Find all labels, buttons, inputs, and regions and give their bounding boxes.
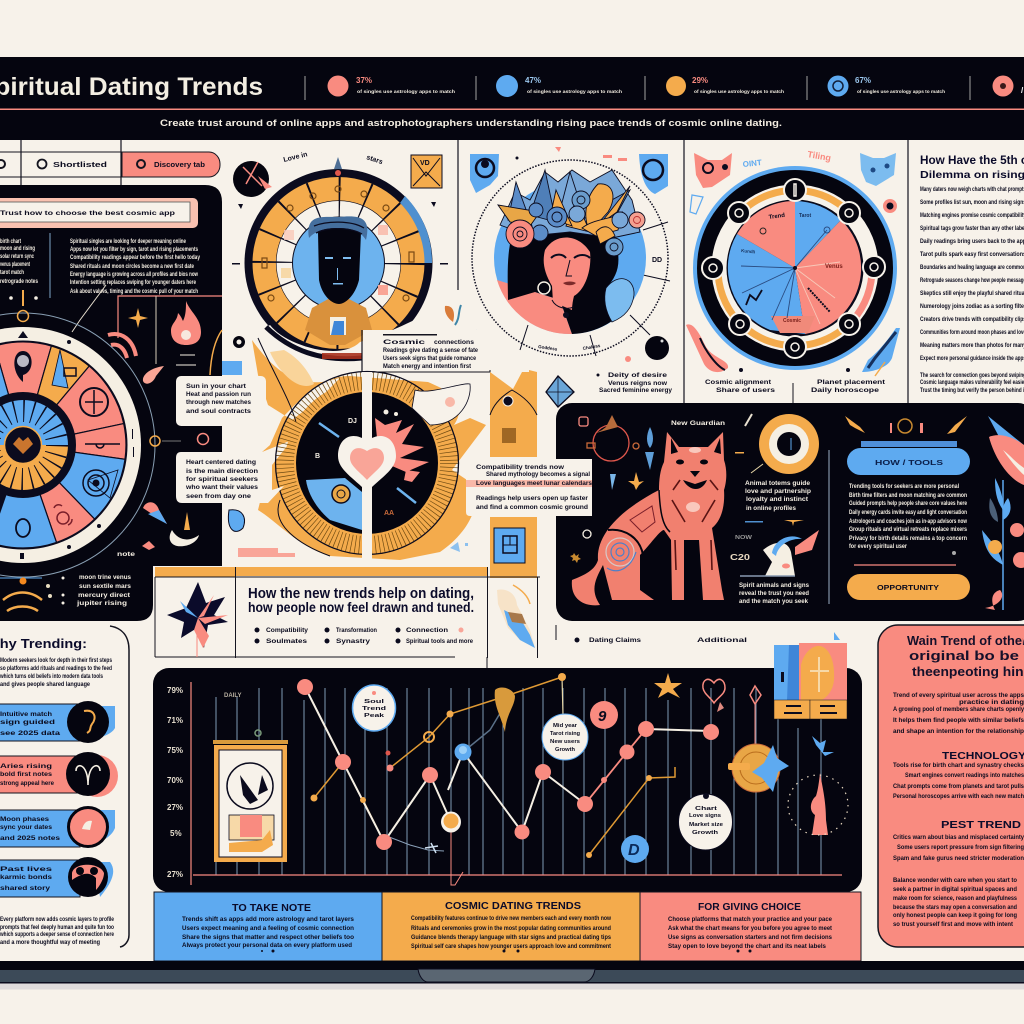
intro (0, 657, 112, 688)
list item: blue 3: sync your dates (0, 824, 53, 831)
card: orange: Compatibility features continue to drive new members each and every month now (411, 915, 611, 922)
icon: rainbow arcs (108, 334, 136, 358)
wheel blue petals (52, 350, 118, 498)
callout left top: Sun in your chart (186, 383, 246, 390)
callout left top: through new matches (186, 399, 252, 406)
legend lines: sun sextile mars (79, 584, 132, 590)
legend lines: moon trine venus (79, 575, 132, 581)
small charms (142, 366, 199, 550)
oval note 2: Mid year (553, 723, 577, 729)
list item: blue 4: shared story (0, 885, 51, 892)
chart: trends line chart panel (153, 643, 862, 892)
icon: bird (497, 585, 535, 648)
note card: Users seek signs that guide romance (383, 355, 476, 362)
list item: blue 1 (0, 701, 115, 743)
y axis labels: 79% (167, 686, 183, 695)
ring ticks (18, 331, 134, 559)
icon: plant (982, 416, 1024, 610)
list item: coral aries: strong appeal here (0, 780, 55, 787)
panel: compatibility pie wheel: Kundli (741, 248, 755, 254)
panel: compatibility pie wheel: Cosmic (783, 318, 801, 324)
y axis labels: 75% (167, 746, 183, 755)
panel: compatibility pie wheel (686, 149, 900, 403)
callout right over wolf panel: Love languages meet lunar calendars (476, 480, 593, 487)
panel: goddess portrait: Goddess (538, 344, 558, 352)
list item: blue 3 (0, 808, 115, 847)
article text: TECHNOLOGY (942, 751, 1024, 762)
pie nodes (702, 179, 885, 358)
intro: so platforms add rituals and readings to the feed (0, 665, 112, 672)
card: orange (382, 892, 640, 961)
oval note 2 (542, 714, 588, 760)
bird text: and the match you seek (739, 599, 809, 605)
callout right over wolf panel: Shared mythology becomes a signal (486, 471, 590, 478)
note card: Cosmic (383, 339, 426, 346)
article text: Balance wonder with care when you start to (893, 877, 1017, 884)
callout right over wolf panel (466, 459, 593, 516)
portrait figure (305, 216, 372, 345)
list item: blue 4: karmic bonds (0, 874, 53, 881)
caption: Daily horoscope (811, 387, 880, 394)
footer text: which supports a deeper sense of connection here (0, 931, 114, 938)
blue highlight point (454, 744, 472, 760)
article text: PEST TREND (941, 820, 1021, 831)
y axis labels (167, 686, 183, 879)
flower crown (498, 170, 645, 256)
text columns (0, 233, 201, 298)
wolf text: loyalty and instinct (746, 497, 808, 503)
y axis labels: 27% (167, 803, 183, 812)
callout left bottom (176, 452, 284, 503)
panel: compatibility pie wheel: Trend (768, 213, 786, 221)
article text: so trust yourself first and move with intent (893, 921, 1013, 928)
callout left bottom: is the main direction (186, 468, 258, 475)
coral badge (590, 701, 618, 729)
icon: altar (774, 643, 847, 719)
sun black disc (295, 391, 439, 535)
card: coral: Stay open to love beyond the chart and its neat labels (668, 943, 827, 950)
list item: blue 4 (0, 857, 113, 897)
caption (705, 368, 885, 403)
icon: winged bird: NOW (735, 535, 752, 541)
list item: blue 1: Intuitive match (0, 711, 52, 718)
card: orange: COSMIC DATING TRENDS (445, 901, 581, 912)
callout banner: Trust how to choose the best cosmic app (0, 210, 175, 217)
card: coral: Use signs as conversation starters and not firm decisions (668, 934, 833, 941)
tab: active coral (122, 152, 220, 177)
bullets (254, 627, 474, 645)
wolf column text: Daily energy cards invite easy and light conversation (849, 510, 967, 516)
stat 4: 67% (855, 76, 871, 85)
panel: coral right article: original bo be (909, 648, 1019, 663)
note card: Match energy and intention first (383, 363, 472, 370)
icon: orange seal with blue star (728, 744, 789, 792)
caption: Planet placement (817, 379, 885, 386)
panel: coral right article: theenpeoting hind (912, 664, 1024, 679)
labels (232, 151, 448, 264)
icon: heart (703, 679, 725, 712)
stat 1 (305, 76, 455, 100)
list item: coral aries: bold first notes (0, 771, 53, 778)
caption: Share of users (716, 387, 776, 394)
tab: active coral: Discovery tab (154, 162, 205, 169)
panel: compatibility pie wheel: Tarot (799, 213, 811, 219)
card: blue: Trends shift as apps add more astrology and tarot layers (182, 916, 355, 923)
section: heart sun illustration: DJ (348, 418, 357, 425)
blue badge (621, 835, 649, 863)
orbit ring (0, 313, 155, 577)
oval note 3: Love signs (689, 813, 721, 819)
callout left bottom: seen from day one (186, 493, 252, 500)
oval note 1 (352, 685, 396, 731)
egg point (441, 812, 461, 832)
callout left bottom: Heart centered dating (186, 459, 256, 466)
wolf text: Animal totems guide (745, 481, 811, 487)
icon: star (654, 673, 682, 698)
oval note 1: Trend (362, 706, 386, 712)
card: coral: Choose platforms that match your practice and your pace (668, 916, 833, 923)
labels: stars (365, 154, 384, 166)
stat 3: 29% (692, 76, 708, 85)
ring pastel tiles (281, 225, 388, 295)
orange tag (490, 370, 537, 578)
y axis labels: 27% (167, 870, 183, 879)
card: blue: Users expect meaning and a feeling of cosmic connection (182, 925, 354, 932)
node on orbit (150, 434, 208, 446)
icon: leaves (845, 416, 967, 447)
list item: blue 1: see 2025 data (0, 730, 61, 737)
ring glyphs (262, 186, 414, 301)
pie sectors (728, 201, 861, 334)
oval note 3: Chart (695, 806, 718, 812)
card: coral: Ask what the chart means for you before you agree to meet (668, 925, 832, 932)
decor: pen and wand (686, 324, 728, 372)
small orange points (310, 673, 652, 858)
note card (362, 330, 495, 374)
tab bar: Shortlisted (53, 162, 107, 169)
article text: practice in dating (959, 699, 1024, 706)
legend lines: mercury direct (78, 593, 130, 599)
list item: blue 4: Past lives (0, 866, 53, 873)
icon: sparkle (128, 308, 148, 328)
coral badge: 9 (598, 708, 607, 725)
footer text: and a more thoughtful way of meeting (0, 939, 100, 946)
section: star and bullets row (155, 567, 540, 658)
list item: blue 3: Moon phases (0, 816, 50, 823)
legend lines: jupiter rising (76, 601, 127, 607)
text columns: retrograde notes (0, 279, 39, 285)
y axis labels: 70% (167, 776, 183, 785)
orange trend lines (314, 677, 675, 855)
panel: goddess portrait (470, 140, 684, 407)
subtitle: Create trust around of online apps and astrophotographers understanding rising pace trends of cosmic online dating. (160, 118, 782, 128)
stat 4: of singles use astrology apps to match (857, 89, 945, 94)
text columns: Spiritual singles are looking for deeper meaning online (70, 239, 186, 245)
small chart caption: Dating Claims (589, 637, 641, 644)
bird text: reveal the trust you need (739, 591, 809, 597)
decor: cat masks (694, 153, 896, 188)
icon: orbit face (579, 415, 639, 461)
notch (418, 969, 595, 982)
caption (596, 372, 673, 394)
coral burst (375, 418, 429, 472)
footer text: prompts that feel deeply human and quite fun too (0, 924, 114, 931)
note card: connections (434, 339, 474, 346)
panel: wolf (556, 403, 1024, 621)
left wing feather (412, 384, 470, 425)
bullets: Compatibility (266, 627, 309, 634)
panel: left list (0, 626, 129, 947)
tarot card (213, 693, 288, 862)
oval note 3 (678, 740, 732, 850)
callout left bottom: who want their values (185, 484, 259, 491)
wolf column text (849, 484, 968, 550)
icon: diamond pendant (750, 686, 761, 780)
card: orange: Rituals and ceremonies grow in the most popular dating communities around (411, 925, 611, 932)
sun rays ring (285, 381, 449, 545)
panel: coral right article (878, 625, 1024, 947)
card: coral: FOR GIVING CHOICE (698, 902, 801, 913)
wheel segments (0, 342, 126, 548)
icon: eye medallion (745, 414, 819, 474)
oval note 2: Growth (555, 747, 575, 753)
icon: bird blue (812, 736, 834, 756)
oval note 1: Peak (364, 713, 384, 719)
section: heart sun illustration (176, 338, 537, 578)
tarot card: DAILY (224, 693, 241, 699)
wolf column text: for every spiritual user (849, 544, 908, 550)
orange pill: OPPORTUNITY (877, 583, 939, 592)
caption: Deity of desire (608, 372, 668, 379)
wolf text (745, 481, 811, 512)
face (538, 237, 590, 318)
card: orange: Spiritual self care shapes how younger users approach love and commitment (411, 943, 611, 950)
decor shield (639, 154, 668, 194)
wolf text: in online profiles (746, 506, 797, 512)
text columns: Apps now let you filter by sign, tarot and rising placements (70, 247, 198, 253)
blue pill: HOW / TOOLS (875, 458, 943, 467)
panel: goddess portrait: DD (652, 257, 662, 264)
card: blue: Always protect your personal data on every platform used (182, 942, 352, 949)
grid lines (216, 688, 821, 875)
note card: Readings give dating a sense of fate (383, 347, 478, 354)
oval note 2: Tarot rising (550, 731, 580, 737)
list item: blue 1: sign guided (0, 719, 55, 726)
section: heart sun illustration: B (315, 453, 320, 460)
callout left bottom: for spiritual seekers (186, 476, 259, 483)
list item: blue 3: and 2025 notes (0, 835, 61, 842)
wolf column text: Astrologers and coaches join as in-app advisors now (849, 519, 967, 525)
intro: Modern seekers look for depth in their first steps (0, 657, 112, 664)
stat 2: of singles use astrology apps to match (527, 89, 622, 94)
icon: candle sparkle (788, 773, 848, 835)
panel: right article (908, 140, 1024, 403)
text columns: tarot match (0, 270, 24, 276)
icon: envelope: VD (420, 160, 430, 167)
black orb (645, 336, 669, 360)
wolf column text: Privacy for birth details remains a top concern (849, 536, 967, 542)
body text (920, 186, 1024, 394)
text columns: birth chart (0, 239, 21, 245)
y axis labels: 71% (167, 716, 183, 725)
bullets: Soulmates (266, 638, 308, 645)
text columns: Ask about values, timing and the cosmic pull of your match (70, 289, 198, 295)
oval note 1: Soul (364, 699, 385, 705)
bullets: Transformation (336, 627, 377, 634)
flame tuft (495, 688, 515, 732)
blue pill (847, 448, 970, 475)
icon: winged bird: C20 (730, 553, 751, 562)
article text: It helps them find people with similar beliefs (893, 717, 1024, 724)
main line (305, 687, 711, 842)
text columns: solar return sync (0, 254, 34, 260)
callout right over wolf panel: Compatibility trends now (476, 464, 564, 471)
decor shield left (470, 154, 499, 193)
stat 2: 47% (525, 76, 541, 85)
bullets: Spiritual tools and more (406, 638, 474, 645)
wolf text: love and partnership (745, 489, 811, 495)
wolf illustration (572, 432, 726, 605)
stat 2 (476, 75, 622, 100)
card: blue: TO TAKE NOTE (232, 903, 311, 914)
text columns: Compatibility readings appear before the first hello today (70, 255, 201, 261)
caption: Cosmic alignment (705, 379, 771, 386)
heart (350, 448, 384, 480)
panel: compatibility pie wheel: OINT (742, 158, 762, 169)
callout right over wolf panel: Readings help users open up faster (476, 495, 589, 502)
pie spokes and labels (741, 227, 840, 324)
stat 4 (807, 76, 945, 100)
top pendant (9, 290, 38, 322)
panel: right article: Dilemma on rising (920, 169, 1024, 181)
panel: compatibility pie wheel: Tiling (807, 149, 832, 163)
article text: and shape an intention for the relationship (893, 728, 1024, 735)
small charms (516, 147, 631, 362)
oval note 3: Growth (692, 830, 718, 836)
wolf column text: Group rituals and virtual retreats replace mixers (849, 527, 968, 533)
ribbon flag (262, 308, 500, 375)
section: heart sun illustration: AA (384, 510, 394, 517)
bullets: Connection (406, 627, 448, 634)
text columns: Shared rituals and moon circles become a new first date (70, 264, 195, 270)
list item: coral aries: Aries rising (0, 763, 52, 770)
wheel icons (14, 351, 120, 537)
card: blue (154, 892, 382, 961)
stat 3: of singles use astrology apps to match (694, 89, 784, 94)
panel: zodiac portrait wheel (222, 140, 500, 375)
legend lines: note (117, 552, 136, 558)
y axis labels: 5% (170, 829, 182, 838)
list item: coral aries (0, 752, 118, 797)
caption: Sacred feminine energy (599, 387, 673, 394)
wolf column text: Birth time filters and moon matching are common (849, 493, 967, 499)
panel: goddess portrait: Chakras (582, 343, 601, 351)
icon: flame (171, 301, 201, 365)
bullets: Synastry (336, 638, 371, 645)
text columns: venus placement (0, 262, 30, 268)
article text: only honest people can keep it going for long (893, 912, 1017, 919)
footer text: Every platform now adds cosmic layers to profile (0, 916, 114, 923)
callout right over wolf panel: and find a common cosmic ground (476, 504, 588, 511)
card: blue: Share the signs that matter and respect other beliefs too (182, 934, 354, 941)
icon: envelope (411, 155, 442, 188)
oval note 3: Market size (689, 822, 723, 828)
wheel: cream ring (0, 327, 141, 563)
section: star and bullets row: how people now feel drawn and tuned. (248, 599, 474, 615)
labels: Love in (283, 151, 308, 164)
orange pill (847, 574, 970, 600)
stat 5: / (1021, 86, 1024, 95)
blue badge: D (628, 842, 640, 859)
small chart caption: Additional (697, 637, 747, 644)
wolf column text: Trending tools for seekers are more personal (849, 484, 959, 490)
callout left top (176, 376, 266, 426)
wolf column text: Guided prompts help people share core values here (849, 501, 968, 507)
portrait disc (494, 182, 646, 334)
tab bar (0, 140, 220, 185)
article text (893, 692, 1024, 928)
legend lines (0, 552, 136, 611)
icon: badge (233, 161, 272, 197)
decor blue drop (228, 510, 244, 531)
article text: seek a partner in digital spiritual spaces and (893, 886, 1017, 893)
stat 1: 37% (356, 76, 372, 85)
line ornaments (118, 296, 222, 338)
blue square (494, 528, 525, 563)
icon: compass star (167, 582, 228, 657)
oval note 2: New users (550, 739, 580, 745)
data points (297, 679, 719, 850)
bird text: Spirit animals and signs (739, 583, 810, 589)
article text: Trend of every spiritual user across the apps (893, 692, 1024, 699)
card: coral (640, 892, 861, 961)
card: orange: Guidance blends therapy language with star signs and practical dating tips (411, 934, 612, 941)
callout left top: and soul contracts (186, 408, 252, 415)
blue wing eye (306, 478, 362, 530)
vertical cream bar with heart (338, 372, 396, 562)
article text: Tools rise for birth chart and synastry checks (893, 762, 1024, 769)
callout banner (0, 198, 198, 228)
text columns: Intention setting replaces swiping for younger daters here (70, 280, 196, 286)
header bar (0, 57, 1024, 140)
stat 3 (645, 76, 784, 100)
icon: winged bird (730, 530, 819, 576)
callout left top: Heat and passion run (186, 391, 251, 398)
intro: and gives people shared language (0, 681, 90, 688)
bird text (739, 583, 810, 605)
stat 1: of singles use astrology apps to match (357, 89, 455, 94)
panel: wolf: New Guardian (671, 420, 725, 427)
text columns: Energy language is growing across all profiles and bios now (70, 272, 198, 278)
diamond icon (546, 376, 574, 407)
footer text (0, 916, 114, 946)
panel: compatibility pie wheel: Venus (825, 264, 843, 270)
small chart caption (487, 625, 840, 668)
heading: How the new trends help on dating, (248, 586, 474, 602)
wheel hub (0, 392, 76, 498)
stat 5 (970, 76, 1024, 100)
laptop base (0, 961, 1024, 990)
text columns: moon and rising (0, 246, 35, 252)
panel: left black wheel panel (0, 185, 222, 621)
caption: Venus reigns now (608, 380, 667, 387)
intro: which turns old beliefs into modern data tools (0, 673, 103, 680)
axes (191, 682, 842, 885)
flames (252, 340, 486, 560)
